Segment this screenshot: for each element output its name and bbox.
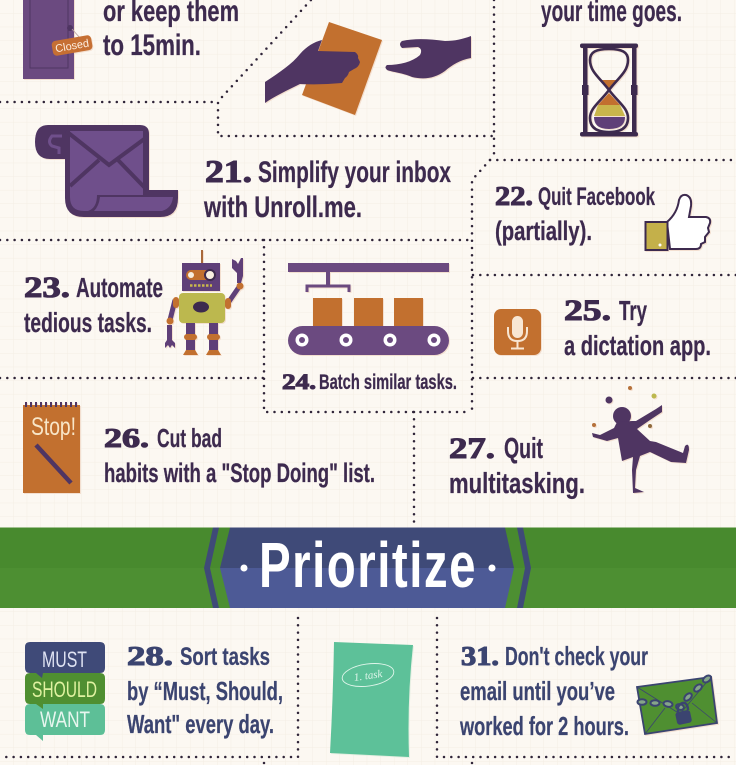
text: tip 27: multitasking.	[449, 468, 585, 500]
heading: Prioritize: Prioritize	[259, 529, 477, 601]
icon: juggler losing balance	[592, 386, 689, 493]
icon: closed door: Closed	[54, 38, 90, 55]
icon: must should want speech bubbles: MUST	[42, 647, 87, 672]
text: tip 28: Want" every day.	[127, 709, 274, 739]
text: tip 24: Batch similar tasks.	[319, 371, 457, 394]
text: tip 23: 23.	[24, 271, 70, 304]
icon: envelope on a scroll	[35, 125, 178, 217]
text: keep meetings short: to 15min.	[103, 29, 201, 62]
text: tip 27: 27.	[449, 432, 495, 465]
panel: tip 19 closed door	[23, 0, 239, 79]
text: tip 27: Quit	[504, 433, 543, 465]
text: tip 24	[282, 369, 457, 394]
icon: closed door	[23, 0, 93, 79]
text: tip 22: Quit Facebook	[538, 183, 655, 211]
icon: robot	[165, 250, 244, 355]
text: tip 23	[24, 271, 163, 338]
text: tip 22: (partially).	[495, 216, 592, 246]
text: tip 21: 21.	[205, 153, 252, 189]
text: tip 26: habits with a "Stop Doing" list.	[104, 458, 375, 488]
text: tip 25: 25.	[564, 294, 611, 327]
text: keep meetings short	[103, 0, 239, 62]
text: tip 22	[495, 181, 655, 246]
icon: must should want speech bubbles	[25, 642, 105, 741]
text: tip 21: with Unroll.me.	[203, 191, 362, 224]
text: tip 25: Try	[619, 295, 647, 326]
text: tip 22: 22.	[495, 181, 533, 211]
text: tip 23: Automate	[76, 272, 163, 303]
icon: dictation microphone	[494, 309, 541, 355]
text: tip 31: Don't check your	[505, 641, 648, 671]
text: tip 25	[564, 294, 711, 361]
text: tip 26: Cut bad	[157, 423, 222, 453]
text: tip 21	[203, 153, 451, 224]
text: tip 28: Sort tasks	[180, 643, 270, 671]
icon: chained locked envelope	[637, 674, 717, 734]
text: tip 28: by “Must, Should,	[127, 676, 283, 706]
icon: stop doing notepad	[23, 402, 80, 493]
text: tip 26: 26.	[104, 423, 149, 453]
icon: thumbs up	[646, 195, 710, 250]
icon: green note with one task	[330, 642, 413, 757]
text: tip 28: 28.	[127, 641, 173, 671]
text: tip 31: email until you’ve	[460, 676, 615, 706]
text: tip 27	[449, 432, 585, 500]
text: tip 24: 24.	[282, 369, 316, 394]
text: tip 23: tedious tasks.	[24, 307, 152, 338]
icon: green note with one task: 1. task	[353, 668, 384, 684]
icon: must should want speech bubbles: WANT	[40, 707, 90, 732]
icon: conveyor belt	[288, 263, 449, 355]
text: tip 26	[104, 423, 375, 488]
text: tip 28	[127, 641, 283, 739]
text: tip 31: worked for 2 hours.	[459, 711, 629, 741]
icon: stop doing notepad: Stop!	[31, 413, 76, 441]
text: tip 31: 31.	[461, 641, 499, 671]
text: tip 31	[459, 641, 648, 741]
icon: hands passing a document	[265, 22, 471, 115]
section banner: Prioritize	[0, 528, 736, 608]
text: tip 21: Simplify your inbox	[258, 156, 451, 189]
icon: must should want speech bubbles: SHOULD	[32, 677, 97, 702]
icon: hourglass	[580, 44, 638, 136]
